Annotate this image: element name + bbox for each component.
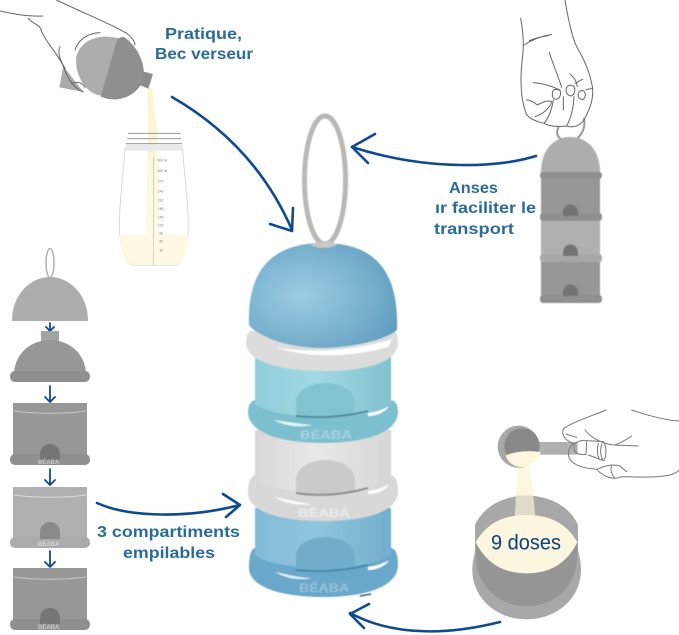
milk stream: [145, 87, 160, 235]
hand: [563, 410, 679, 478]
arrow 3: [45, 469, 55, 485]
label: 9 doses: 9 doses: [491, 531, 561, 554]
illustration: hand carrying container: [521, 0, 602, 303]
heading: Pratique, Bec verseur: Bec verseur: [155, 46, 253, 63]
heading: Pratique, Bec verseur: [155, 26, 253, 63]
scoop: [538, 442, 578, 455]
heading: 3 compartiments empilables: empilables: [123, 545, 215, 562]
white ring: [246, 331, 398, 371]
heading: 3 compartiments empilables: 3 compartiments: [97, 524, 240, 541]
heading: Anses pour faciliter le transport: transport: [434, 221, 514, 238]
blue ring label: BÉABA: [299, 580, 349, 595]
compartment 1: [10, 403, 90, 466]
arrow 4: [45, 551, 55, 567]
baby bottle: 300 ml: [157, 169, 168, 173]
baby bottle: 150: [158, 216, 164, 220]
illustration: scoop and 9 doses: [472, 410, 679, 619]
compartment 3: BÉABA: [38, 623, 60, 631]
illustration: hand pouring into bottle: [0, 0, 188, 265]
small loop: [46, 248, 54, 278]
arrow 2: [45, 386, 55, 402]
arrow: to compartments: [97, 494, 240, 517]
scuff mark: [360, 594, 371, 596]
heading: 3 compartiments empilables: [97, 524, 240, 562]
baby bottle: 210: [158, 199, 164, 203]
milk stream: [516, 467, 533, 496]
baby bottle: 60: [159, 240, 163, 244]
arrow 1: [46, 323, 54, 331]
blue dome: [249, 243, 397, 348]
main product: stacked container: [246, 116, 398, 597]
lid dome: [12, 277, 88, 321]
baby bottle: 30: [159, 248, 163, 252]
heading: Anses pour faciliter le transport: Anses: [449, 180, 498, 197]
compartment 2: BÉABA: [38, 540, 60, 548]
hand outline: [521, 0, 593, 127]
grey loop: [557, 118, 584, 140]
arrow: to spout: [172, 97, 293, 231]
grey ring: [248, 475, 398, 521]
baby bottle: 270: [158, 179, 164, 183]
grey compartment: [255, 430, 391, 493]
baby bottle: [119, 133, 188, 265]
baby bottle: 240: [158, 190, 164, 194]
heading: Anses pour faciliter le transport: ır faciliter le: [435, 200, 536, 217]
grey ring label: BÉABA: [298, 505, 350, 520]
heading: Pratique, Bec verseur: Pratique,: [165, 26, 242, 43]
bottle scale: 300 ml: [157, 158, 168, 162]
baby bottle: 180: [158, 207, 164, 211]
heading: Anses pour faciliter le transport: [434, 180, 536, 238]
compartment 1: BÉABA: [38, 458, 60, 466]
hand outline: [0, 0, 135, 92]
pouring cap: [10, 331, 90, 382]
compartment 2: [10, 487, 90, 548]
powder surface: [476, 515, 577, 573]
container: [472, 496, 581, 619]
pouring bottle dome: [59, 37, 153, 99]
illustration: exploded stack: [10, 248, 90, 631]
blue ring: [249, 548, 398, 597]
compartment 3: [10, 568, 90, 631]
grey stack: [540, 137, 602, 303]
loop handle: [304, 116, 346, 244]
arrow: to loop handle: [352, 134, 536, 165]
teal ring: [248, 400, 398, 443]
teal compartment: [255, 355, 391, 417]
baby bottle: 120: [158, 224, 164, 228]
arrow: bottom to base: [350, 604, 500, 631]
blue compartment: [255, 508, 391, 568]
baby bottle: 90: [159, 232, 163, 236]
teal ring label: BÉABA: [300, 427, 352, 442]
